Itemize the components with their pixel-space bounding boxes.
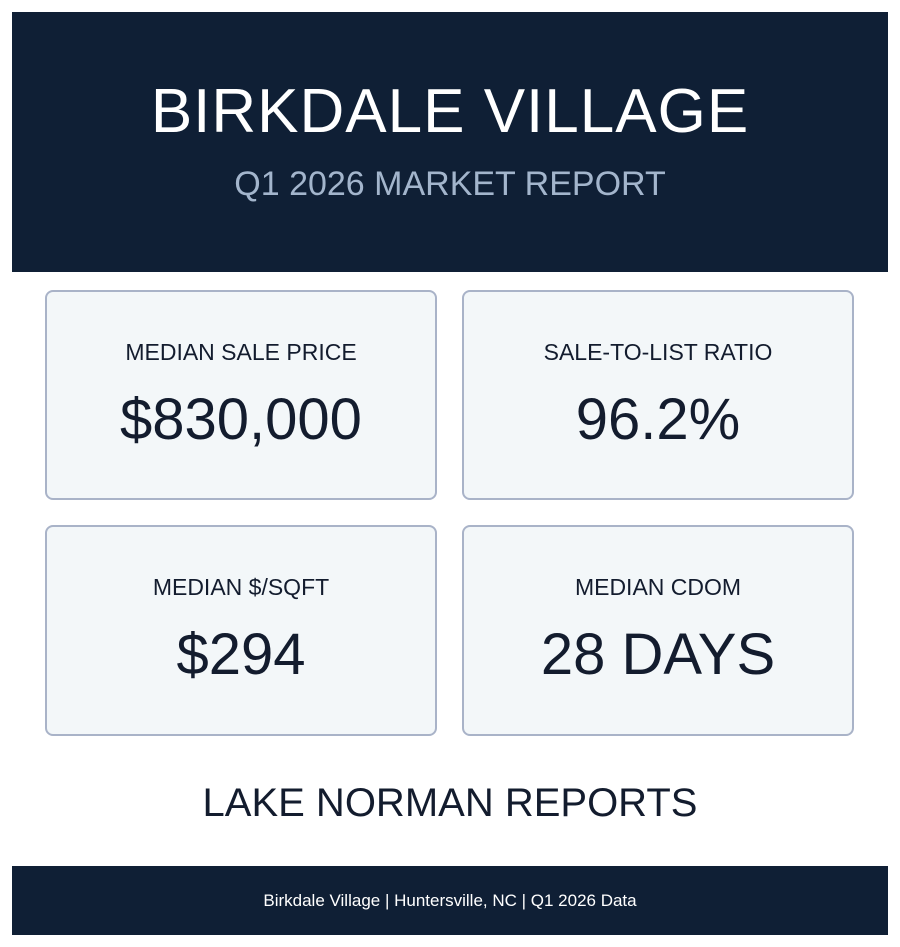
subtitle: Q1 2026 MARKET REPORT — [234, 165, 666, 203]
footer — [12, 866, 888, 935]
card: median cdom — [462, 525, 854, 736]
header — [12, 12, 888, 272]
card: sale-to-list ratio: SALE-TO-LIST RATIO — [544, 339, 772, 365]
card: median $/sqft: $294 — [176, 622, 306, 687]
footer: Birkdale Village | Huntersville, NC | Q1 2026 Data — [263, 891, 637, 910]
card: median sale price — [45, 290, 437, 500]
card: median cdom: 28 DAYS — [541, 622, 775, 687]
title: BIRKDALE VILLAGE — [151, 77, 749, 146]
card: median sale price: $830,000 — [120, 387, 362, 452]
card: sale-to-list ratio — [462, 290, 854, 500]
card: median $/sqft — [45, 525, 437, 736]
card: sale-to-list ratio: 96.2% — [576, 387, 740, 452]
card: median sale price: MEDIAN SALE PRICE — [125, 339, 357, 365]
card: median cdom: MEDIAN CDOM — [575, 574, 741, 600]
card: median $/sqft: MEDIAN $/SQFT — [153, 574, 329, 600]
brand: LAKE NORMAN REPORTS — [203, 781, 697, 825]
